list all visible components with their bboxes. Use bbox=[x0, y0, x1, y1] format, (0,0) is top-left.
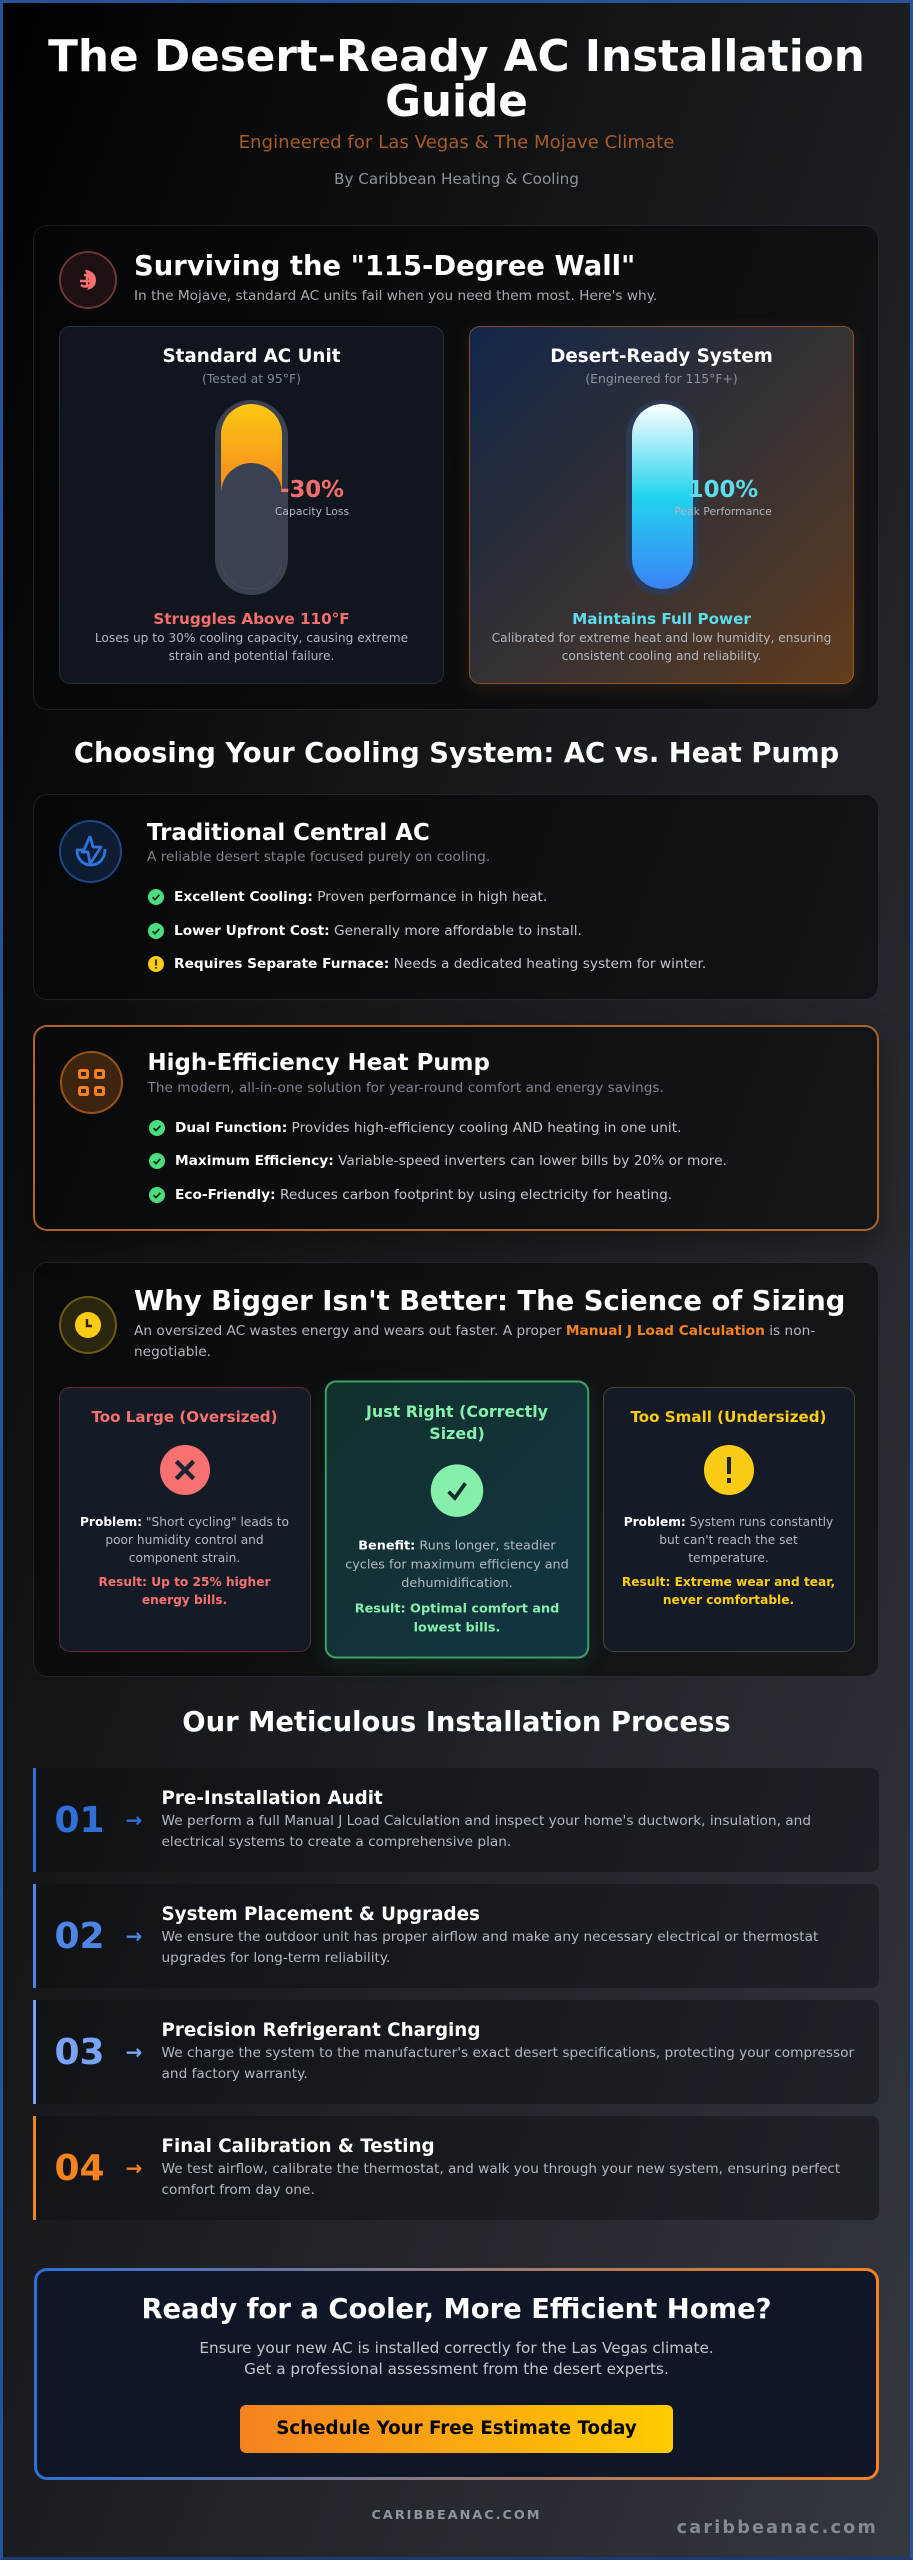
step text: We charge the system to the manufacturer's exact desert specifications, protecting your compressor bbox=[162, 2044, 854, 2060]
problem text: but can't reach the set bbox=[659, 1533, 798, 1547]
step text bbox=[162, 1812, 811, 1850]
list item: Maximum Efficiency: Variable-speed inverters can lower bills by 20% or more. bbox=[175, 1153, 727, 1169]
icon: check bbox=[149, 1187, 165, 1203]
panel: traditional central AC bbox=[33, 794, 879, 1000]
stat caption: Capacity Loss bbox=[275, 505, 349, 518]
step text: We perform a full Manual J Load Calculation and inspect your home's ductwork, insulation, and bbox=[162, 1812, 811, 1828]
stat caption: Peak Performance bbox=[674, 505, 772, 518]
step 1 bbox=[33, 1768, 879, 1872]
problem text: temperature. bbox=[688, 1551, 769, 1565]
card: standard AC unit bbox=[59, 326, 444, 684]
verdict: Maintains Full Power bbox=[572, 610, 751, 628]
icon: lightning bbox=[59, 820, 122, 883]
step 3 bbox=[33, 2000, 879, 2104]
benefit text bbox=[345, 1538, 568, 1591]
heading: Traditional Central AC bbox=[147, 820, 430, 846]
arrow: → bbox=[126, 2040, 142, 2064]
footer url: CARIBBEANAC.COM bbox=[372, 2508, 541, 2523]
problem text bbox=[624, 1515, 833, 1565]
title: The Desert-Ready AC Installation bbox=[48, 31, 865, 82]
result text bbox=[622, 1575, 835, 1607]
icon: check bbox=[430, 1464, 483, 1517]
stat: peak performance: 100% bbox=[688, 477, 758, 503]
step number: 02 bbox=[54, 1916, 105, 1957]
panel: sizing science bbox=[33, 1262, 879, 1677]
step title: Precision Refrigerant Charging bbox=[162, 2020, 480, 2040]
title bbox=[48, 31, 865, 127]
card heading: Too Small (Undersized) bbox=[631, 1408, 826, 1426]
icon: cross bbox=[160, 1445, 210, 1495]
benefit text: cycles for maximum efficiency and bbox=[345, 1557, 568, 1572]
result text: Result: Up to 25% higher bbox=[99, 1575, 270, 1589]
step number: 01 bbox=[54, 1800, 105, 1841]
step number: 04 bbox=[54, 2148, 105, 2189]
icon: check bbox=[149, 1153, 165, 1169]
card heading: Too Large (Oversized) bbox=[92, 1408, 277, 1426]
intro text: In the Mojave, standard AC units fail when you need them most. Here's why. bbox=[134, 288, 657, 304]
problem text bbox=[80, 1515, 289, 1565]
step text: comfort from day one. bbox=[162, 2182, 315, 2198]
result text: never comfortable. bbox=[663, 1593, 794, 1607]
stat: capacity loss: -30% bbox=[280, 477, 344, 503]
icon: exclamation bbox=[704, 1445, 754, 1495]
problem text: Problem: "Short cycling" leads to bbox=[80, 1515, 289, 1529]
verdict text: consistent cooling and reliability. bbox=[562, 649, 761, 663]
description: The modern, all-in-one solution for year-round comfort and energy savings. bbox=[148, 1080, 664, 1096]
card: desert-ready system bbox=[469, 326, 854, 684]
intro text bbox=[134, 1323, 815, 1360]
step text bbox=[162, 2044, 854, 2082]
watermark: caribbeanac.com bbox=[677, 2518, 878, 2538]
step text: We test airflow, calibrate the thermostat, and walk you through your new system, ensuring perfect bbox=[162, 2160, 840, 2176]
list item: Requires Separate Furnace: Needs a dedicated heating system for winter. bbox=[174, 956, 706, 972]
problem text: Problem: System runs constantly bbox=[624, 1515, 833, 1529]
step text: upgrades for long-term reliability. bbox=[162, 1950, 390, 1966]
card heading: Standard AC Unit bbox=[163, 346, 340, 367]
verdict: Struggles Above 110°F bbox=[153, 610, 350, 628]
CTA text bbox=[199, 2339, 714, 2378]
CTA heading: Ready for a Cooler, More Efficient Home? bbox=[141, 2294, 772, 2325]
intro text: An oversized AC wastes energy and wears out faster. A proper Manual J Load Calculation is non- bbox=[134, 1323, 815, 1339]
problem text: poor humidity control and bbox=[105, 1533, 264, 1547]
verdict text: Loses up to 30% cooling capacity, causing extreme bbox=[95, 631, 408, 645]
arrow: → bbox=[126, 1808, 142, 1832]
gauge: desert-ready 100 percent bbox=[626, 400, 698, 595]
heading: High-Efficiency Heat Pump bbox=[148, 1050, 490, 1076]
title: Guide bbox=[385, 76, 528, 127]
section heading: cooling system: Choosing Your Cooling System: AC vs. Heat Pump bbox=[74, 738, 839, 769]
step title: System Placement & Upgrades bbox=[162, 1904, 480, 1924]
card test note: (Tested at 95°F) bbox=[202, 371, 301, 386]
gauge: standard unit 70 percent bbox=[215, 400, 288, 595]
icon: check bbox=[149, 1120, 165, 1136]
benefit text: Benefit: Runs longer, steadier bbox=[358, 1538, 555, 1553]
panel: high-efficiency heat pump bbox=[33, 1025, 879, 1231]
result text: Result: Extreme wear and tear, bbox=[622, 1575, 835, 1589]
CTA button bbox=[240, 2405, 673, 2453]
verdict text: Calibrated for extreme heat and low humidity, ensuring bbox=[492, 631, 831, 645]
step 2 bbox=[33, 1884, 879, 1988]
CTA text: Get a professional assessment from the desert experts. bbox=[244, 2360, 669, 2378]
intro text: negotiable. bbox=[134, 1344, 211, 1360]
verdict text: strain and potential failure. bbox=[169, 649, 334, 663]
CTA button: Schedule Your Free Estimate Today bbox=[276, 2418, 637, 2439]
card: just right bbox=[324, 1380, 589, 1659]
CTA text: Ensure your new AC is installed correctly for the Las Vegas climate. bbox=[199, 2339, 714, 2357]
arrow: → bbox=[126, 2156, 142, 2180]
result text bbox=[354, 1601, 559, 1635]
verdict text bbox=[95, 631, 408, 663]
arrow: → bbox=[126, 1924, 142, 1948]
verdict text bbox=[492, 631, 831, 663]
step text bbox=[162, 2160, 840, 2198]
card engineered note: (Engineered for 115°F+) bbox=[585, 371, 738, 386]
step title: Final Calibration & Testing bbox=[162, 2136, 435, 2156]
byline: By Caribbean Heating & Cooling bbox=[334, 170, 579, 188]
problem text: component strain. bbox=[129, 1551, 240, 1565]
card heading bbox=[365, 1402, 548, 1443]
card: too small bbox=[602, 1387, 854, 1652]
icon: four squares bbox=[60, 1051, 123, 1114]
result text: lowest bills. bbox=[413, 1620, 500, 1635]
icon: check bbox=[148, 923, 164, 939]
icon: heat flame bbox=[59, 251, 117, 309]
list item: Eco-Friendly: Reduces carbon footprint by using electricity for heating. bbox=[175, 1187, 672, 1203]
step number: 03 bbox=[54, 2032, 105, 2073]
card heading: Sized) bbox=[429, 1424, 484, 1443]
icon: check bbox=[148, 889, 164, 905]
step text: and factory warranty. bbox=[162, 2066, 308, 2082]
icon: clock bbox=[59, 1296, 117, 1354]
heading: Surviving the "115-Degree Wall" bbox=[134, 251, 635, 282]
card heading: Just Right (Correctly bbox=[366, 1402, 548, 1421]
card: too large bbox=[58, 1387, 310, 1652]
list item: Excellent Cooling: Proven performance in high heat. bbox=[174, 889, 547, 905]
section heading: installation process: Our Meticulous Installation Process bbox=[182, 1707, 731, 1738]
list item: Dual Function: Provides high-efficiency cooling AND heating in one unit. bbox=[175, 1120, 681, 1136]
step text: electrical systems to create a comprehensive plan. bbox=[162, 1834, 511, 1850]
result text: energy bills. bbox=[142, 1593, 227, 1607]
step 4 bbox=[33, 2116, 879, 2220]
benefit text: dehumidification. bbox=[401, 1576, 512, 1591]
heading: Why Bigger Isn't Better: The Science of Sizing bbox=[134, 1286, 845, 1317]
panel: 115-degree wall bbox=[33, 225, 879, 710]
subtitle: Engineered for Las Vegas & The Mojave Climate bbox=[239, 132, 674, 153]
description: A reliable desert staple focused purely on cooling. bbox=[147, 849, 490, 865]
result text: Result: Optimal comfort and bbox=[354, 1601, 559, 1616]
step text bbox=[162, 1928, 818, 1966]
result text bbox=[99, 1575, 270, 1607]
list item: Lower Upfront Cost: Generally more affordable to install. bbox=[174, 923, 582, 939]
card heading: Desert-Ready System bbox=[550, 346, 773, 367]
call to action panel bbox=[34, 2268, 879, 2480]
step title: Pre-Installation Audit bbox=[162, 1788, 383, 1808]
icon: warning bbox=[148, 956, 164, 972]
step text: We ensure the outdoor unit has proper airflow and make any necessary electrical or thermostat bbox=[162, 1928, 818, 1944]
